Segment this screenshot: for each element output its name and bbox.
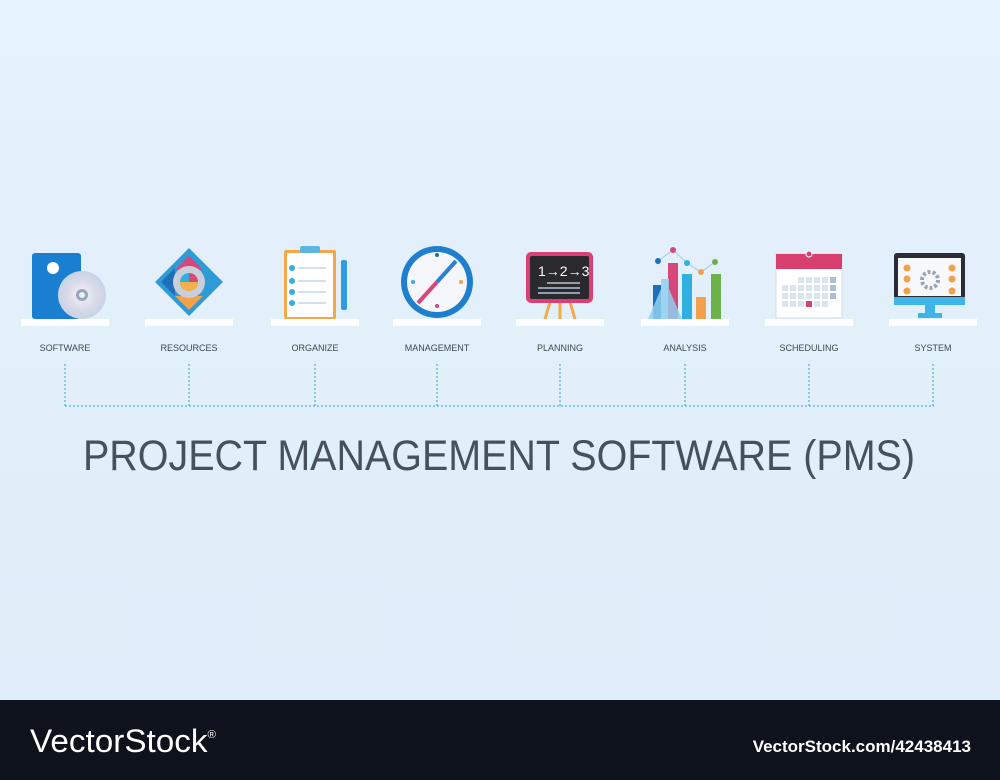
icon: clipboard <box>284 246 347 319</box>
footer bar: ® <box>208 729 216 741</box>
icon: chalkboard <box>526 252 593 319</box>
title: PROJECT MANAGEMENT SOFTWARE (PMS) <box>83 432 915 480</box>
labels: ORGANIZE <box>291 343 339 353</box>
labels: PLANNING <box>537 343 583 353</box>
labels: RESOURCES <box>160 343 218 353</box>
footer bar: VectorStock <box>30 723 201 759</box>
footer bar: VectorStock.com/42438413 <box>753 737 971 756</box>
labels <box>40 343 952 353</box>
labels: MANAGEMENT <box>405 343 470 353</box>
icon: chalkboard: 1→2→3 <box>538 263 590 279</box>
labels: SOFTWARE <box>40 343 90 353</box>
icon: system monitor <box>894 253 965 318</box>
icon: software box with CD <box>32 253 106 319</box>
labels: SCHEDULING <box>779 343 839 353</box>
icon: calendar <box>776 251 842 318</box>
labels: SYSTEM <box>914 343 952 353</box>
icon: resources puzzle gear <box>155 248 223 316</box>
connector lines <box>65 364 934 406</box>
footer bar <box>0 700 1000 780</box>
icon: analysis chart <box>648 247 721 319</box>
labels: ANALYSIS <box>663 343 707 353</box>
icon: compass <box>401 246 473 318</box>
shelves <box>21 319 977 326</box>
